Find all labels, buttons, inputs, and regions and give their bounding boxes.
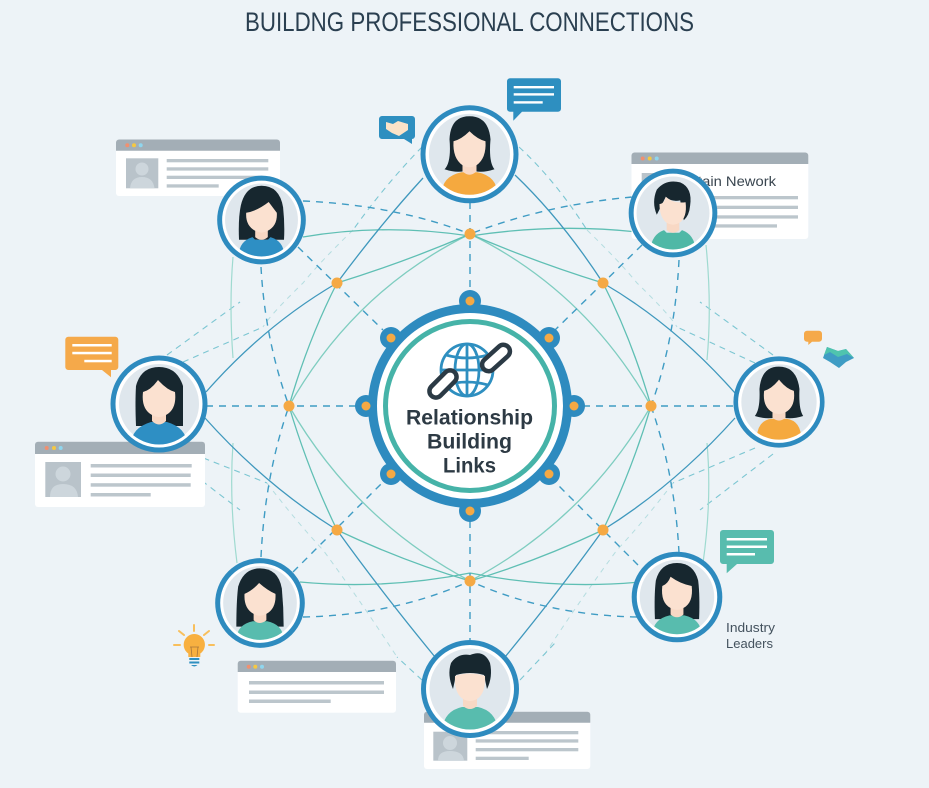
- profile card: bottom left: [238, 661, 396, 713]
- speech bubble: small orange: [804, 331, 822, 345]
- hub outer ring with connector bumps: [355, 290, 585, 522]
- teal arcs: [289, 228, 651, 585]
- avatar: right woman, orange shirt: [736, 359, 822, 445]
- icon: handshake bubble: [379, 116, 415, 144]
- speech bubble: left orange: [65, 337, 118, 377]
- avatar: bottom right woman, teal shirt: [634, 554, 720, 640]
- hub label: Links: [443, 454, 496, 478]
- label: industry leaders: Leaders: [726, 636, 773, 651]
- pale teal verticals: [231, 245, 709, 563]
- avatar: top woman, orange shirt: [423, 108, 516, 201]
- avatar: left woman, blue shirt: [113, 358, 205, 450]
- profile card: top right: [632, 152, 808, 239]
- profile card: bottom: [424, 712, 590, 769]
- icon: chain links: [427, 342, 513, 400]
- hub label: Building: [427, 430, 512, 454]
- speech bubble: top blue: [507, 78, 561, 121]
- hub label: [406, 406, 533, 478]
- icon: globe: [441, 344, 493, 396]
- network: connection lines: [167, 147, 773, 680]
- hub label: Relationship: [406, 406, 533, 430]
- blue dashes: [206, 197, 735, 640]
- avatar: bottom man, teal shirt: [424, 642, 516, 736]
- avatar: bottom left woman, teal shirt: [218, 561, 302, 645]
- light teal arcs: [289, 234, 651, 581]
- faint dashes: [263, 230, 677, 657]
- central hub: [355, 290, 585, 522]
- avatar: top left woman, blue shirt: [220, 178, 303, 262]
- avatar: top right person, teal shirt: [631, 171, 715, 255]
- profile card: top left: [116, 140, 280, 196]
- title: BUILDNG PROFESSIONAL CONNECTIONS: [245, 7, 694, 37]
- speech bubble: right teal: [720, 530, 774, 573]
- icon: light bulb: [174, 625, 214, 666]
- blue arcs: [205, 175, 735, 657]
- label: industry leaders: [726, 620, 776, 651]
- network nodes: [284, 228, 656, 586]
- profile card: left: [35, 442, 205, 507]
- icon: teal handshake: [823, 347, 854, 368]
- label: industry leaders: Industry: [726, 620, 776, 635]
- profile card: top right: Maintain Nework: [666, 173, 777, 189]
